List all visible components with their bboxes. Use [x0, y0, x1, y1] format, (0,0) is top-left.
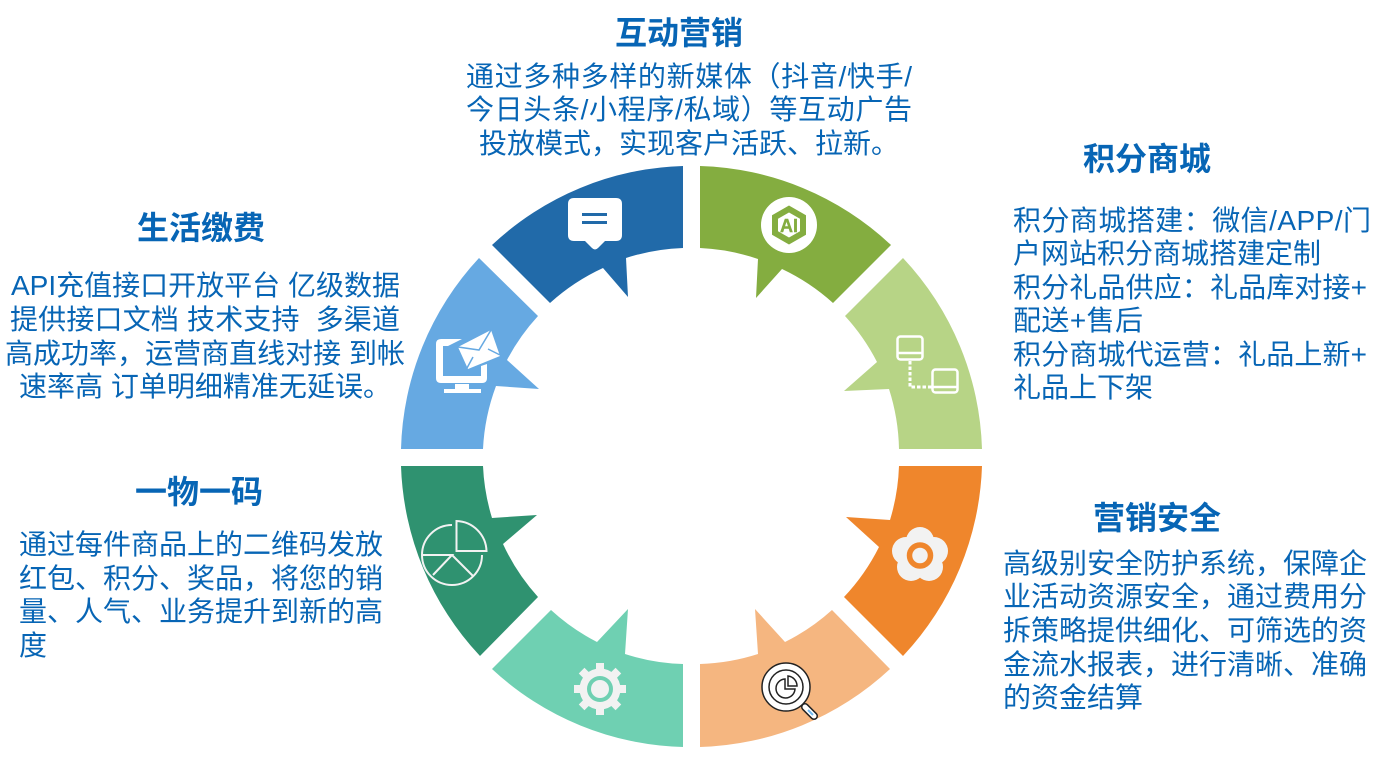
segment: 一物一码 dark green	[401, 466, 538, 656]
heading: 积分商城: 积分商城	[1083, 141, 1211, 177]
text block: 积分商城: 积分商城搭建：微信/APP/门	[1013, 205, 1371, 236]
ring diagram	[401, 166, 982, 747]
text block: 一物一码: 度	[19, 630, 47, 661]
text block: 营销安全: 业活动资源安全，通过费用分	[1003, 581, 1367, 612]
text block: 生活缴费: API充值接口开放平台 亿级数据	[11, 270, 400, 301]
text block: 一物一码: 通过每件商品上的二维码发放	[19, 529, 383, 560]
text block: 积分商城: 积分商城代运营：礼品上新+	[1013, 339, 1367, 370]
text block: 积分商城: 积分礼品供应：礼品库对接+	[1013, 272, 1367, 303]
text block: 积分商城: 户网站积分商城搭建定制	[1013, 238, 1321, 269]
text block: 生活缴费: 高成功率，运营商直线对接 到帐	[5, 338, 405, 369]
text block: 生活缴费: 速率高 订单明细精准无延误。	[19, 371, 391, 402]
text block: 互动营销: 今日头条/小程序/私域）等互动广告	[466, 94, 912, 125]
text block: 积分商城: 礼品上下架	[1013, 372, 1153, 403]
icon: monitor with envelope	[436, 330, 500, 393]
text block: 互动营销: 投放模式，实现客户活跃、拉新。	[479, 128, 899, 159]
text block: 积分商城	[1013, 141, 1371, 403]
heading: 互动营销: 互动营销	[615, 15, 743, 51]
text block: 营销安全: 拆策略提供细化、可筛选的资	[1003, 615, 1367, 646]
icon: connected devices	[898, 336, 958, 392]
text block: 营销安全: 金流水报表，进行清晰、准确	[1003, 649, 1367, 680]
segment: 互动 dark blue	[492, 166, 683, 303]
text block: 营销安全: 的资金结算	[1003, 682, 1143, 713]
heading: 一物一码: 一物一码	[135, 474, 263, 510]
icon: AI hexagon	[761, 197, 817, 253]
text block: 一物一码: 红包、积分、奖品，将您的销	[19, 563, 383, 594]
segment: 积分 green	[700, 166, 891, 303]
text block: 互动营销: 通过多种多样的新媒体（抖音/快手/	[466, 61, 912, 92]
heading: 生活缴费: 生活缴费	[137, 210, 265, 246]
text block: 生活缴费	[5, 210, 405, 402]
icon: AI hexagon: AI	[780, 216, 798, 236]
icon: gear	[574, 663, 626, 715]
text block: 一物一码: 量、人气、业务提升到新的高	[19, 596, 383, 627]
icon: magnifier	[762, 663, 814, 716]
segment: 生活 light blue	[401, 258, 539, 449]
segment: peach	[700, 609, 890, 747]
text block: 积分商城: 配送+售后	[1013, 305, 1143, 336]
icon: flower	[892, 527, 948, 581]
segment: mint	[492, 609, 683, 747]
text block: 生活缴费: 提供接口文档 技术支持 多渠道	[10, 304, 400, 335]
text block: 营销安全	[1003, 500, 1367, 713]
segment: 营销安全 orange	[844, 466, 982, 656]
icon: pie chart	[422, 521, 486, 585]
heading: 营销安全: 营销安全	[1093, 500, 1221, 536]
text block: 一物一码	[19, 474, 383, 661]
text block: 营销安全: 高级别安全防护系统，保障企	[1003, 548, 1367, 579]
icon: chat bubble	[568, 198, 622, 250]
segment: light green	[844, 258, 982, 449]
text block: 互动营销	[466, 15, 912, 159]
